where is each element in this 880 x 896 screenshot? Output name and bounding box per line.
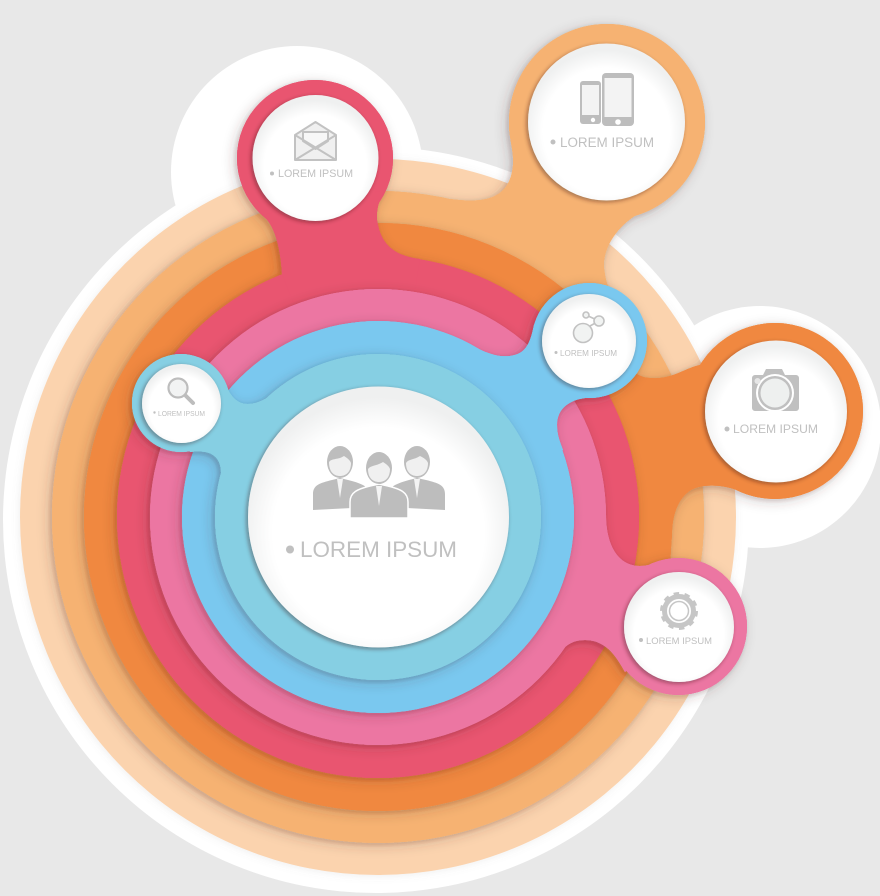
ring: pink with connector [150,289,747,745]
person: right [392,446,445,510]
ring: pale peach [20,159,736,875]
person: center [350,452,408,518]
label: molecule: LOREM IPSUM [560,349,617,358]
ring: red with connector [117,80,639,778]
icon: team [313,446,445,518]
icon: envelope [295,122,336,160]
icon: magnifier [168,378,193,403]
ring: light orange with connector [52,24,705,843]
label: center: LOREM IPSUM [300,537,457,562]
icon: molecule [574,312,604,342]
ring: teal with connector [132,354,541,680]
node: mail [252,95,378,221]
node: search [142,364,221,443]
node: settings [624,572,734,682]
icon: gear [662,594,696,628]
label: search: LOREM IPSUM [158,411,205,418]
label: settings: LOREM IPSUM [646,636,712,647]
person: left [313,446,366,510]
label: phones: LOREM IPSUM [560,135,654,150]
center panel [248,386,509,648]
icon: phones [580,73,634,126]
label: mail: LOREM IPSUM [278,168,353,180]
node: phones [528,44,685,200]
node: camera [705,340,847,482]
icon: camera [752,369,799,412]
label: camera: LOREM IPSUM [733,422,818,436]
ring: orange with connector [84,223,863,811]
ring: blue with connector [182,283,647,713]
node: molecule [542,294,636,388]
